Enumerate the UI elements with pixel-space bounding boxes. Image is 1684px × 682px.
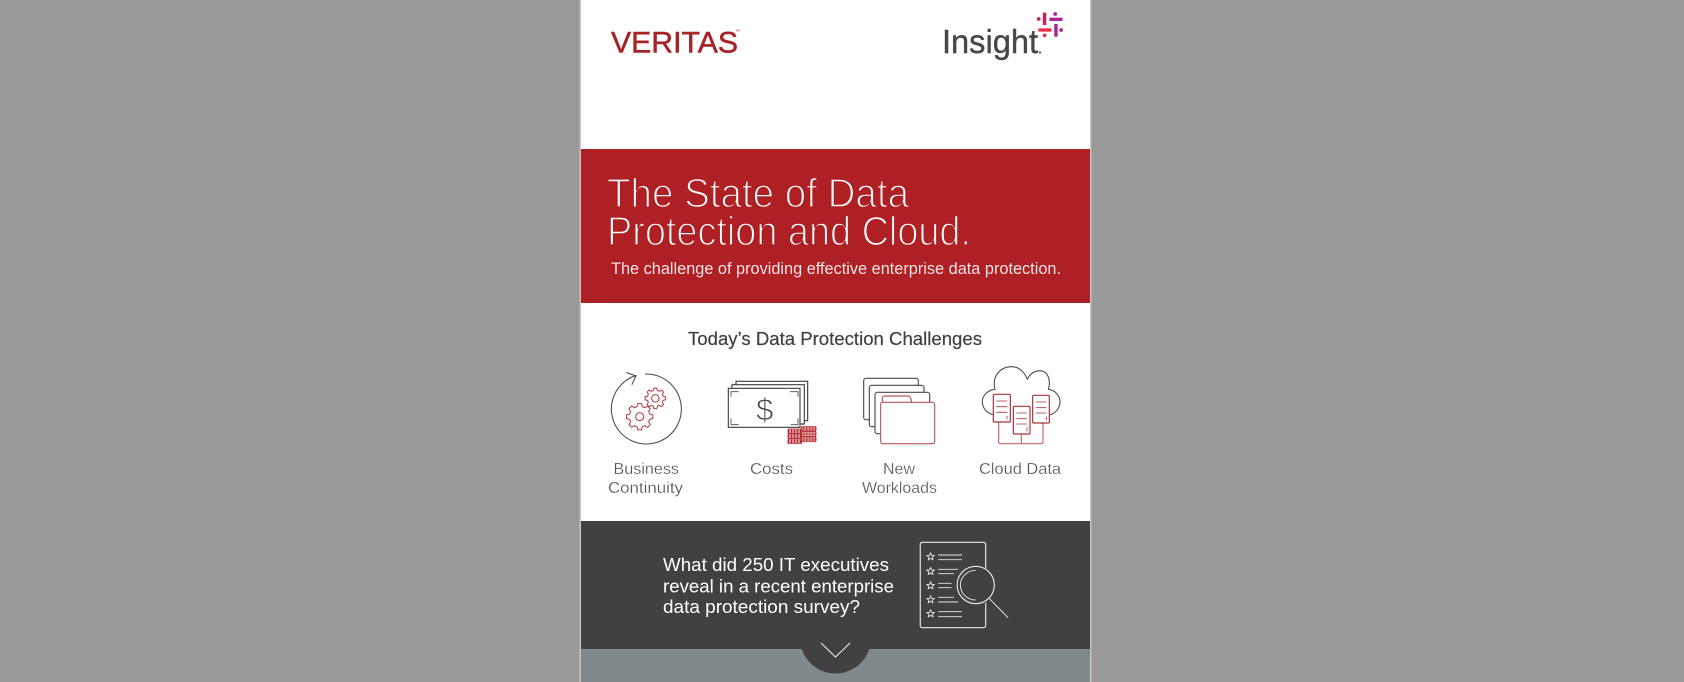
title: Protection and Cloud. xyxy=(607,208,971,254)
title xyxy=(607,170,971,254)
red folder xyxy=(881,396,935,444)
servers xyxy=(993,394,1049,434)
icon: cloud data xyxy=(982,367,1060,444)
magnifier xyxy=(957,566,1008,618)
label: business continuity: Business xyxy=(614,461,679,478)
icon: Insight mark xyxy=(1037,12,1063,37)
survey question text: What did 250 IT executives xyxy=(663,554,889,575)
panel: bottom grey strip xyxy=(581,649,1090,682)
panel: dark survey band xyxy=(581,521,1090,674)
label: business continuity xyxy=(608,461,683,497)
icon: coins xyxy=(788,427,816,444)
panel: infographic page xyxy=(580,0,1092,682)
label: new workloads: Workloads xyxy=(862,480,937,497)
stars xyxy=(927,553,935,617)
label: cloud data: Cloud Data xyxy=(979,461,1061,478)
subtitle: The challenge of providing effective enterprise data protection. xyxy=(611,260,1061,278)
panel: red title banner xyxy=(581,149,1090,303)
label: new workloads: New xyxy=(883,461,915,478)
connectors xyxy=(999,422,1043,444)
label: costs: Costs xyxy=(750,461,793,478)
survey question text: reveal in a recent enterprise xyxy=(663,576,894,596)
heading: challenges: Today’s Data Protection Challenges xyxy=(688,328,982,349)
label: business continuity: Continuity xyxy=(608,480,683,497)
icon: new workloads xyxy=(864,378,935,444)
survey question text: data protection survey? xyxy=(663,596,860,617)
icon: costs xyxy=(728,381,816,444)
icon: business continuity xyxy=(611,373,681,444)
logo: Insight: Insight xyxy=(942,24,1039,61)
icon: survey document with magnifier xyxy=(920,542,1008,628)
title: The State of Data xyxy=(607,170,909,216)
survey question text xyxy=(663,554,894,617)
dollar sign: $ xyxy=(756,392,773,427)
logo: Veritas: ™ xyxy=(735,29,740,35)
logo: Veritas: VERITAS xyxy=(611,26,738,60)
icon: small gear xyxy=(645,388,666,409)
logo: Insight xyxy=(942,12,1063,61)
icon: large gear xyxy=(626,403,653,430)
icon: chevron arrow xyxy=(821,643,850,657)
label: new workloads xyxy=(862,461,937,497)
